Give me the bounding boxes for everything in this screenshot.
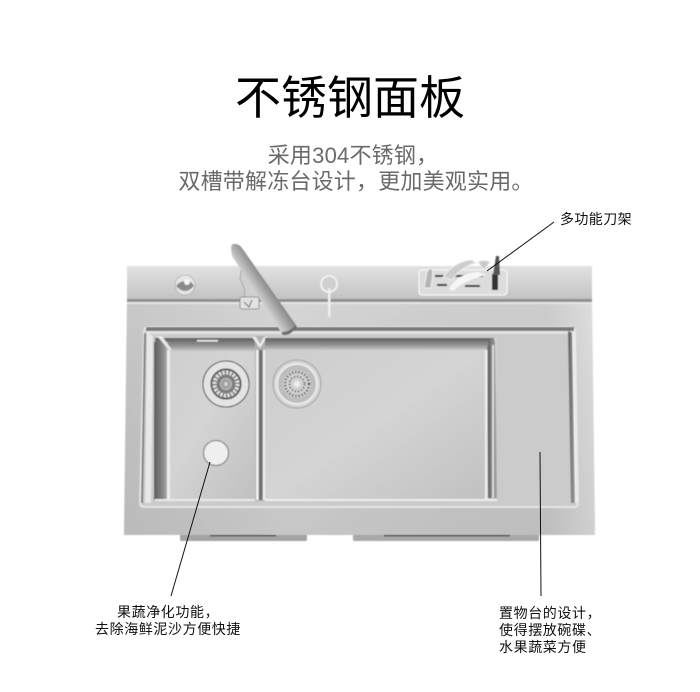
label: shelf: 水果蔬菜方便 [499,639,587,655]
rear deck [127,266,592,304]
subtitle: 采用304不锈钢， [268,143,438,168]
divider [252,336,267,501]
icon: faucet [231,244,297,335]
subtitle: 双槽带解冻台设计，更加美观实用。 [178,169,534,194]
title: 不锈钢面板 [235,72,465,124]
sink body [124,298,595,535]
icon: soap dispenser [321,276,337,317]
label: purifier: 去除海鲜泥沙方便快捷 [95,621,241,637]
label: purifier [95,604,241,637]
icon: knife rack [419,256,507,295]
label: purifier: 果蔬净化功能， [117,604,219,620]
leader line: purifier [171,462,210,596]
leader line: knife rack [487,222,554,271]
icon: purifier cover [204,440,228,466]
under-mount feet [180,534,539,541]
icon: deck button [175,275,195,295]
label: shelf: 使得摆放碗碟、 [499,622,601,638]
leader line: shelf [540,452,541,596]
label: knife rack: 多功能刀架 [560,211,632,227]
recessed rim [140,327,578,507]
right basin [265,338,497,501]
left basin [154,336,255,501]
label: shelf: 置物台的设计， [499,605,601,621]
icon: left drain strainer [203,361,249,407]
label: shelf [499,605,601,655]
icon: right drain strainer [273,360,321,408]
sink illustration [124,244,595,541]
subtitle [178,143,534,194]
